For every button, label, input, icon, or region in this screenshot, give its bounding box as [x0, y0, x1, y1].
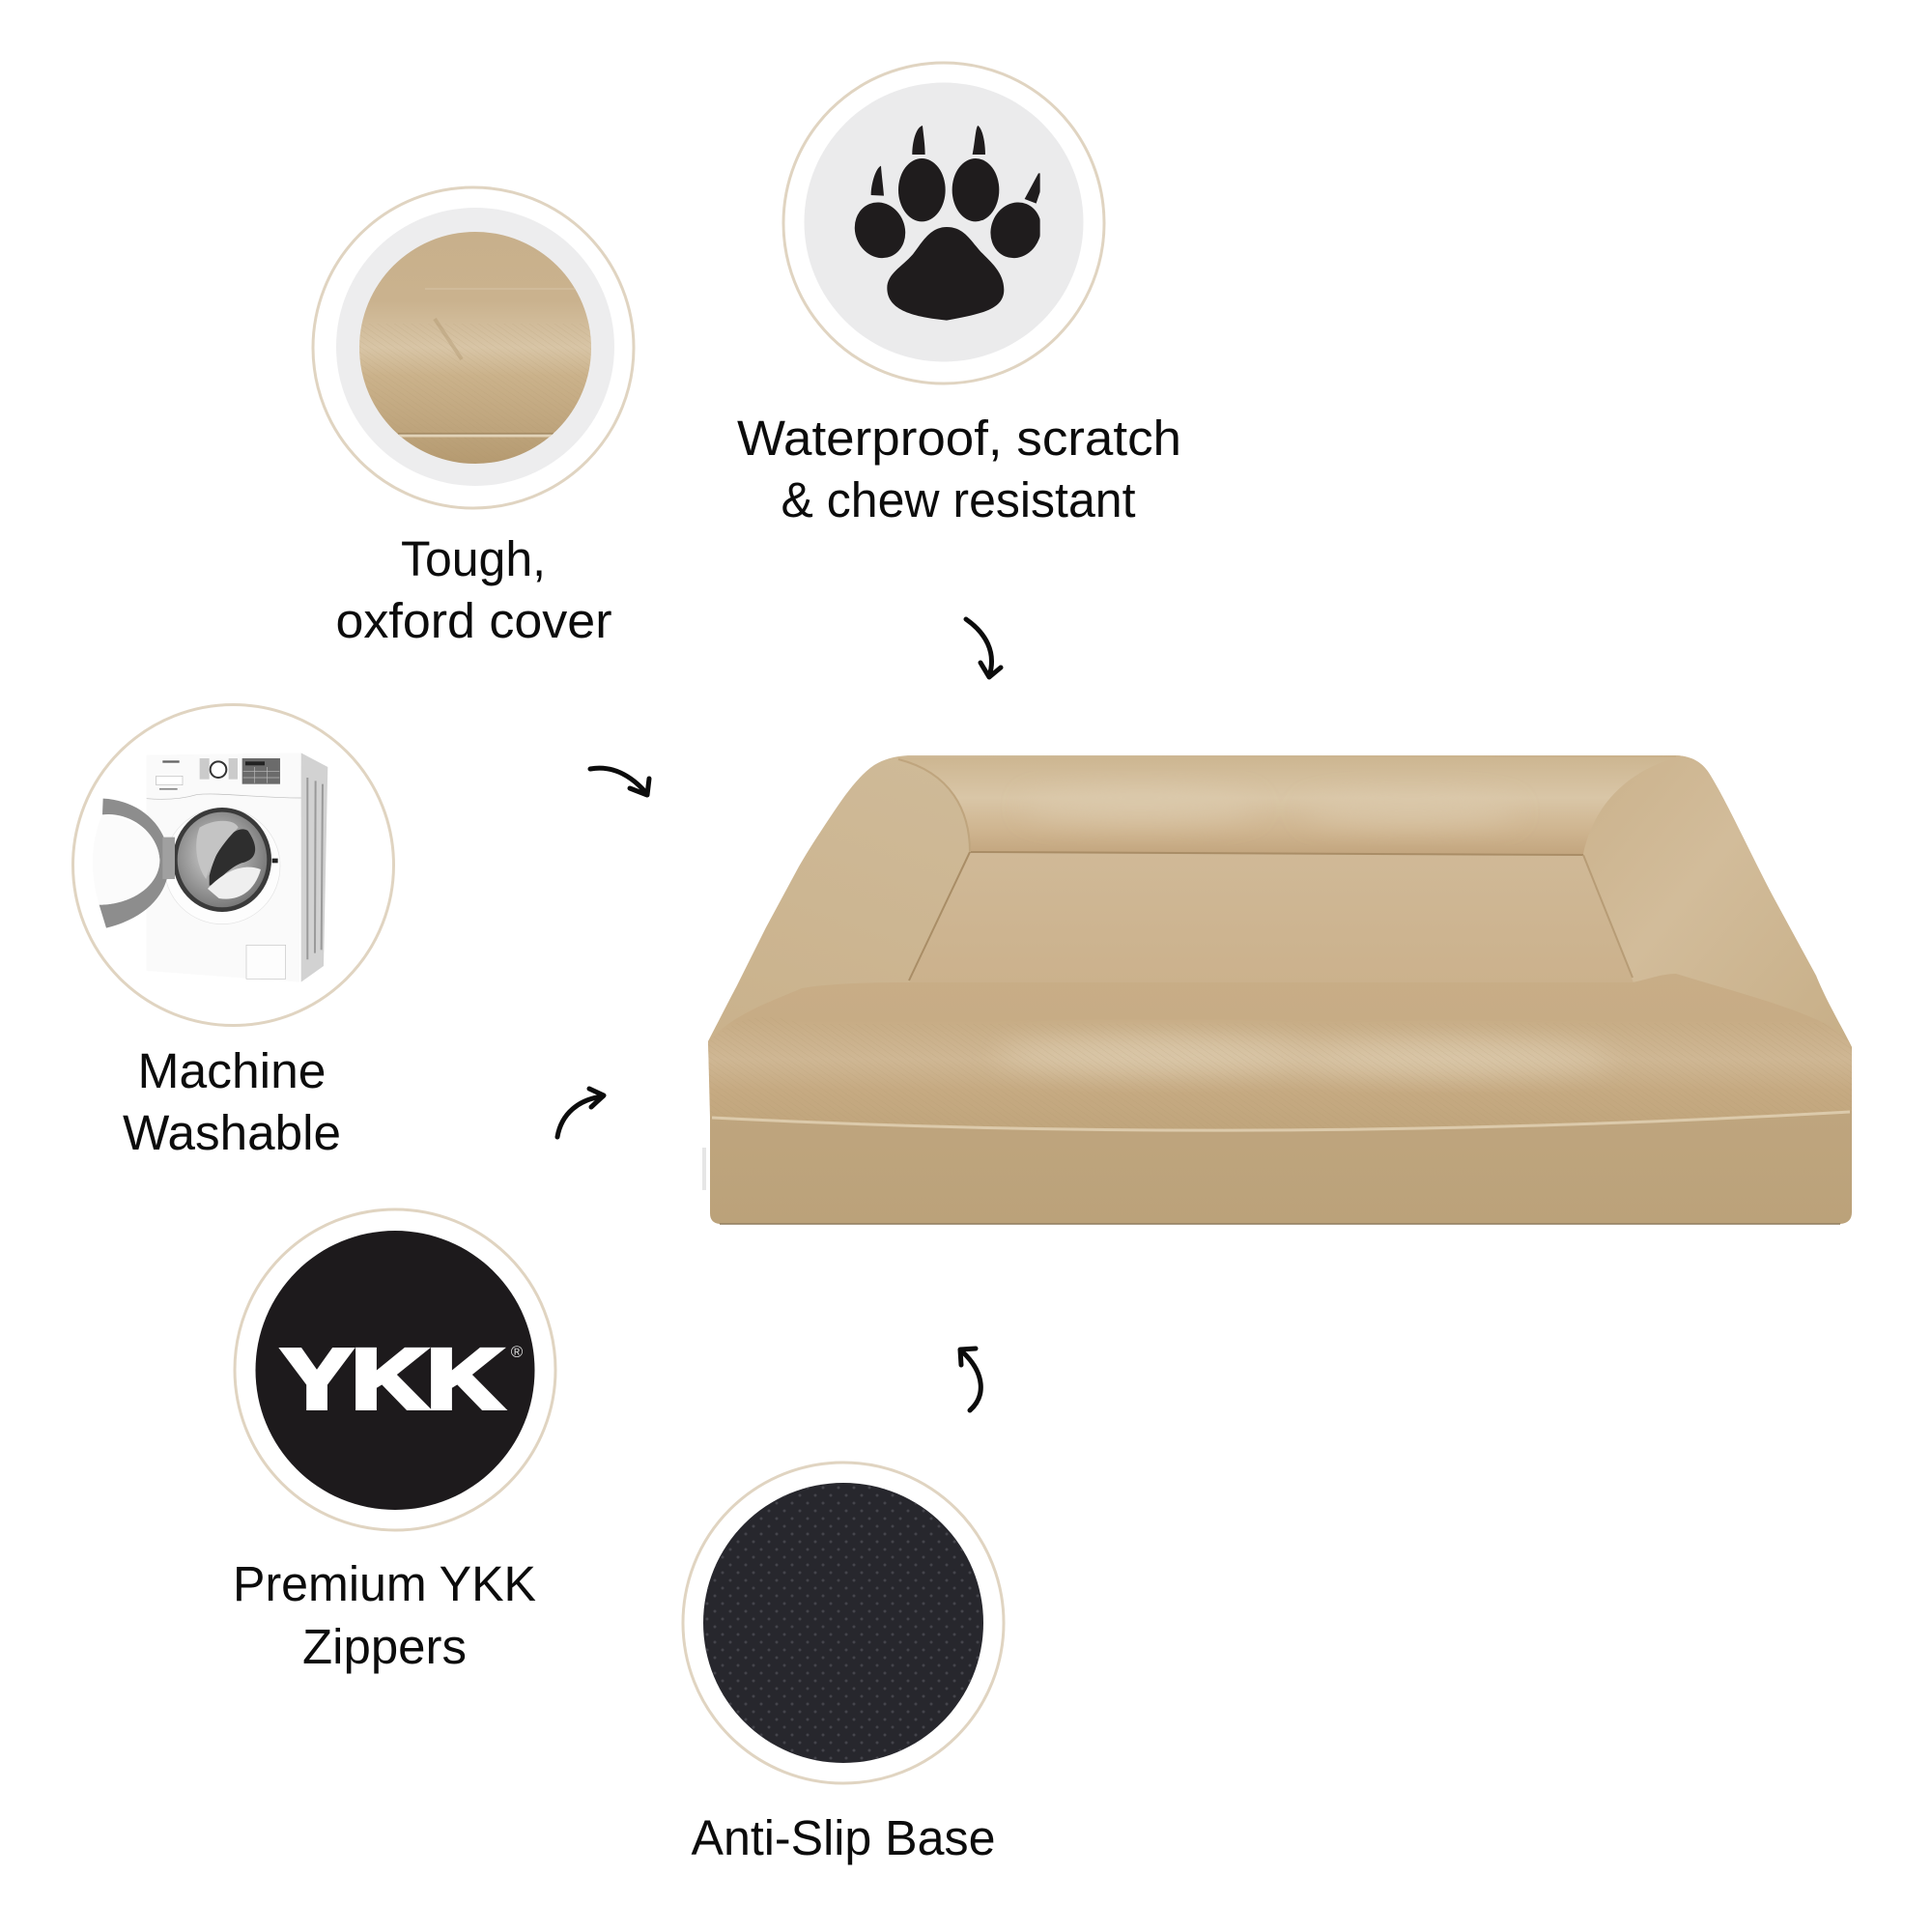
caption: YKK zippers: Premium YKK — [233, 1556, 536, 1611]
caption: tough oxford cover — [336, 531, 612, 648]
caption: anti-slip base: Anti-Slip Base — [692, 1810, 995, 1865]
caption: tough oxford cover: Tough, — [401, 531, 546, 586]
caption: machine washable: Washable — [123, 1105, 341, 1160]
grey disc: oxford cover — [336, 208, 614, 486]
ring: paw — [783, 63, 1104, 384]
front bolster highlights — [995, 1039, 1613, 1072]
sleeping pad — [908, 853, 1634, 985]
front bolster weave texture — [708, 1017, 1852, 1129]
caption: waterproof: & chew resistant — [781, 472, 1136, 527]
back bolster sheen — [1024, 791, 1517, 825]
care label — [702, 1148, 706, 1190]
pad crease lines — [898, 759, 1633, 980]
back bolster — [894, 757, 1679, 854]
zipper seam — [712, 1112, 1850, 1130]
badge: tough oxford cover — [313, 187, 634, 508]
badge: washing machine — [73, 705, 394, 1026]
logo: YKK: YKK — [282, 1333, 502, 1426]
icon: washing machine — [93, 753, 327, 982]
arrow: from anti-slip — [960, 1349, 980, 1410]
product: bed — [702, 755, 1852, 1224]
grey disc: paw — [804, 83, 1084, 361]
caption: waterproof: Waterproof, scratch — [737, 411, 1181, 466]
ring: anti-slip — [683, 1463, 1004, 1783]
base cushion — [710, 1111, 1852, 1224]
badge: anti-slip base — [683, 1463, 1004, 1783]
bed bolster silhouette — [708, 755, 1852, 1159]
badge: YKK — [235, 1209, 555, 1530]
arrow: from waterproof — [966, 619, 1001, 677]
ring: oxford cover — [313, 187, 634, 508]
fabric swatch — [359, 231, 591, 465]
bottom edge shadow — [720, 1223, 1840, 1225]
arrow: from oxford cover — [590, 768, 649, 795]
caption: tough oxford cover: oxford cover — [336, 593, 612, 648]
icon: paw print — [846, 126, 1049, 321]
caption: machine washable: Machine — [137, 1043, 327, 1098]
caption: machine washable — [123, 1043, 341, 1160]
ring: washer — [73, 705, 394, 1026]
caption: YKK zippers — [233, 1556, 536, 1674]
arrow: from machine washable — [557, 1089, 604, 1137]
registered mark: ® — [511, 1343, 524, 1361]
black disc: YKK — [255, 1231, 535, 1510]
dark swatch: anti-slip — [701, 1480, 986, 1765]
caption: waterproof — [737, 411, 1181, 527]
front bolster — [708, 974, 1852, 1129]
ring: YKK — [235, 1209, 555, 1530]
caption: YKK zippers: Zippers — [302, 1619, 467, 1674]
right bolster — [1583, 755, 1852, 1082]
badge: waterproof paw — [783, 63, 1104, 384]
